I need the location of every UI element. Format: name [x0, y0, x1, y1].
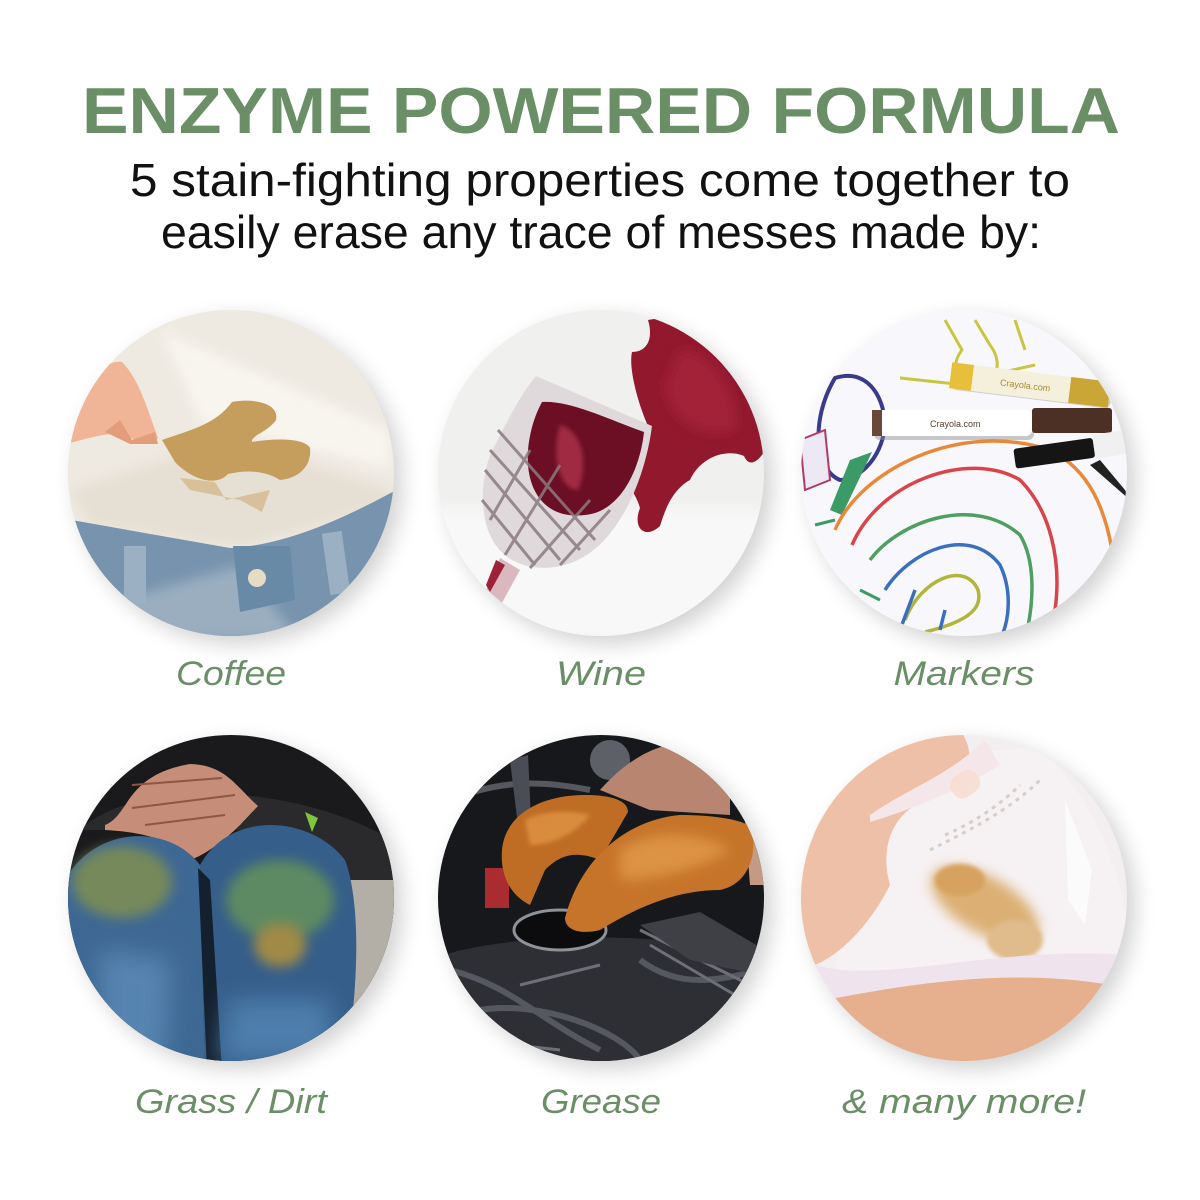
- hand left: [795, 730, 969, 965]
- drawing: yellow figure: [900, 320, 1035, 385]
- label: grass and dirt: Grass / Dirt: [135, 1083, 329, 1121]
- drawing: purple figure: [819, 376, 885, 480]
- panel: grass and dirt: [60, 730, 402, 1070]
- markers: Crayola.com: [999, 377, 1051, 393]
- subtitle: 5 stain-fighting properties come together to: [130, 154, 1070, 206]
- hands: [105, 764, 258, 860]
- subtitle: easily erase any trace of messes made by:: [161, 206, 1041, 258]
- jeans: [75, 492, 393, 636]
- rainbow arcs: [835, 441, 1112, 640]
- title: ENZYME POWERED FORMULA: [82, 74, 1120, 147]
- panel: grease: [430, 730, 772, 1070]
- arm bottom: [834, 974, 1108, 1061]
- hand: [70, 362, 158, 442]
- subtitle: [130, 154, 1070, 258]
- jeans: [65, 836, 205, 1070]
- panel: markers: Crayola.com: [930, 419, 981, 429]
- panel: many more: [795, 730, 1135, 1070]
- label: wine: Wine: [556, 655, 646, 693]
- panel: wine: [430, 300, 772, 644]
- label: markers: Markers: [894, 655, 1034, 693]
- panel: coffee: [60, 300, 402, 644]
- gloves: [502, 795, 628, 905]
- stain: [162, 401, 310, 481]
- label: many more: & many more!: [842, 1083, 1087, 1121]
- panel: markers: [795, 300, 1135, 644]
- stem: [486, 558, 520, 602]
- crystal cut pattern: [482, 430, 610, 568]
- stain: [923, 858, 1047, 946]
- stains: [72, 846, 172, 918]
- glass bowl: [483, 376, 652, 568]
- tool: [510, 755, 530, 818]
- arm: [600, 741, 730, 815]
- label: grease: Grease: [541, 1083, 661, 1121]
- engine part: [514, 910, 606, 950]
- markers: [949, 362, 1113, 409]
- label: coffee: Coffee: [176, 655, 286, 693]
- wine spill: [631, 319, 763, 532]
- engine cover: [640, 912, 757, 972]
